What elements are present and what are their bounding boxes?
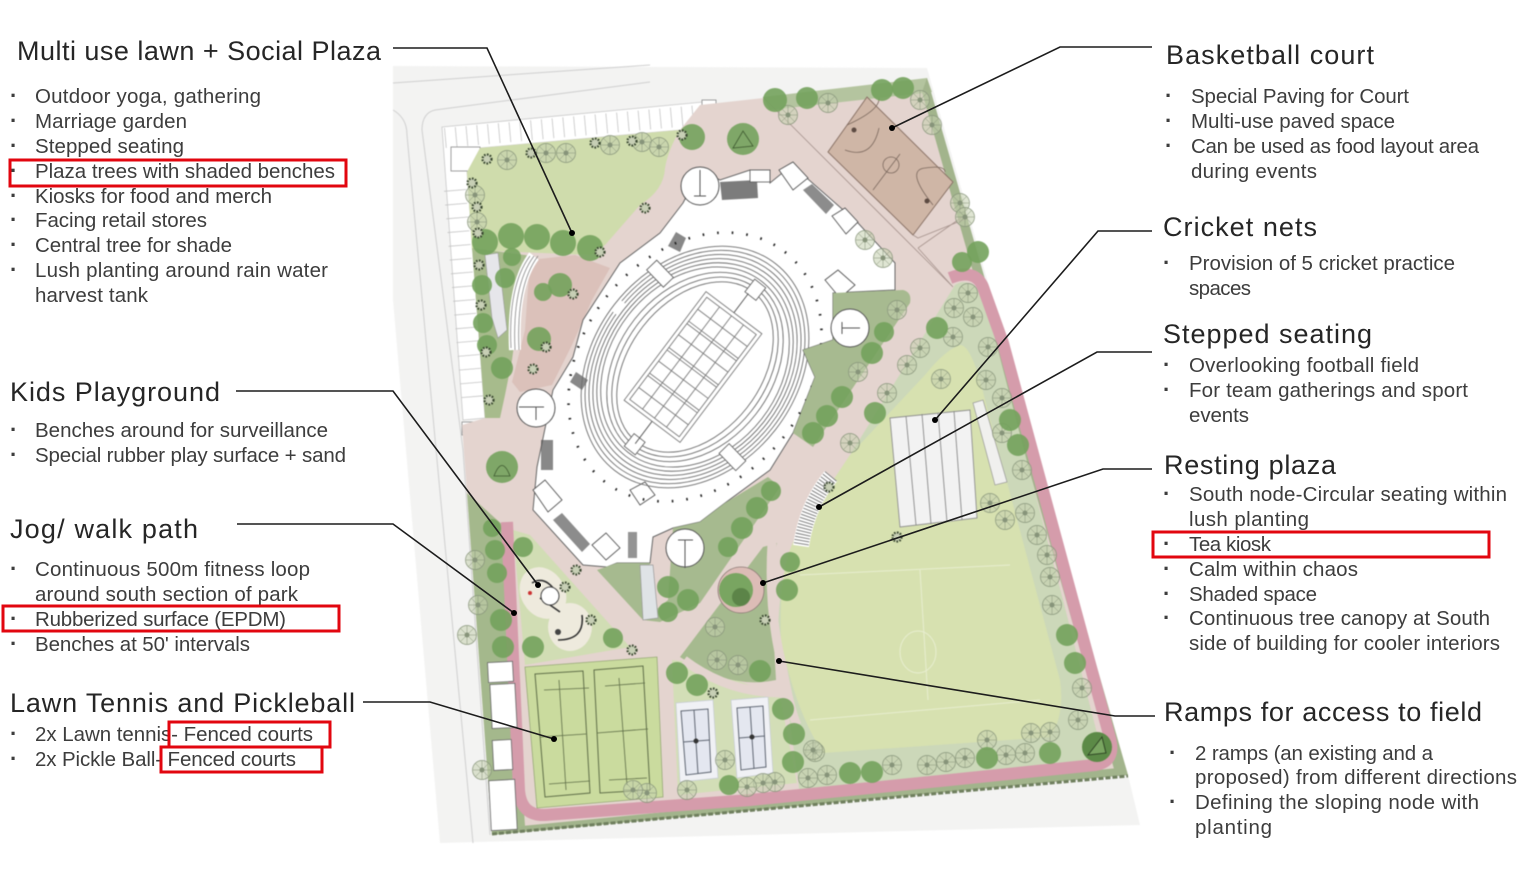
text block: resting plaza: side of building for cooler interiors [1189,632,1500,655]
text block: lawn tennis and pickleball: 2x Lawn tennis- Fenced courts [35,723,313,746]
text block: basketball court: · [1165,83,1172,108]
text block: basketball court: Special Paving for Court [1191,85,1409,108]
south-west stair block [570,372,588,390]
text block: cricket nets: · [1163,250,1170,275]
paved site base [462,80,1128,835]
football field [781,345,1061,753]
text block: cricket nets: Cricket nets [1163,212,1317,242]
resting plaza [718,567,764,613]
text block: jog walk path [10,514,310,656]
text block: multi use lawn [10,36,382,307]
text block: resting plaza: · [1163,581,1170,606]
rain water harvest tank trees [494,131,753,476]
text block: resting plaza: · [1163,605,1170,630]
west planting strip south [467,493,525,835]
list: multi use lawn items: Outdoor yoga, gathering [35,85,261,108]
list: multi use lawn items [10,83,335,307]
leader line: tennis [363,702,557,742]
south corner tree [1082,732,1112,762]
west stair strip [541,440,553,470]
list: multi use lawn items: · [10,207,17,232]
north-west stair block [668,232,686,252]
east rooms [779,162,858,298]
text block: resting plaza [1163,450,1507,655]
text block: resting plaza: Shaded space [1189,583,1317,606]
heading: multi use lawn: Multi use lawn + Social Plaza [17,36,382,66]
text block: ramps for access: · [1169,789,1176,814]
text block: stepped seating: Stepped seating [1163,319,1372,349]
text block: kids playground: · [10,417,17,442]
north stairs [720,180,758,200]
line trees [458,90,1092,802]
text block: kids playground: Benches around for surveillance [35,419,328,442]
south-west rooms [533,480,655,560]
gray rain water tank and arc seating [485,253,538,350]
text block: ramps for access: Ramps for access to field [1164,697,1482,727]
text block: resting plaza: Continuous tree canopy at South [1189,607,1490,630]
list: multi use lawn items: · [10,183,17,208]
social plaza paving [512,255,610,392]
text block: jog walk path: around south section of park [35,583,299,606]
text block: resting plaza: South node-Circular seating within [1189,483,1507,506]
lawn tennis courts [525,657,663,808]
text block: basketball court: Can be used as food layout area [1191,135,1480,158]
north-east plaza lines [763,97,968,287]
text block: cricket nets: Provision of 5 cricket practice [1189,252,1455,275]
text block: stepped seating: For team gatherings and sport [1189,379,1468,402]
text block: resting plaza: Calm within chaos [1189,558,1358,581]
text block: resting plaza: Resting plaza [1164,450,1337,480]
list: multi use lawn items: Kiosks for food and merch [35,185,272,208]
stadium seating rings [516,182,874,552]
leader line: resting plaza [760,469,1152,586]
list: multi use lawn items: Lush planting around rain water [35,259,328,282]
leader line: basketball [889,47,1152,131]
text block: basketball court: during events [1191,160,1317,183]
text block: kids playground: Special rubber play surface + sand [35,444,346,467]
text block: lawn tennis and pickleball: 2x Pickle Ball- Fenced courts [35,748,296,771]
east border strip [922,78,1128,776]
text block: ramps for access: proposed) from different directions [1195,766,1517,789]
centre circle [900,631,936,673]
south-west stairs [553,513,590,552]
list: multi use lawn items: Plaza trees with shaded benches [35,160,335,183]
south-west playground lawn [513,530,630,665]
text block: basketball court [1165,40,1480,183]
text block: kids playground [10,377,346,467]
basketball court [828,97,953,235]
text block: stepped seating: Overlooking football field [1189,354,1419,377]
text block: jog walk path: Jog/ walk path [10,514,198,544]
kids playground [510,559,592,651]
text block: ramps for access: Defining the sloping node with [1195,791,1479,814]
text block: jog walk path: · [10,606,17,631]
list: multi use lawn items: Marriage garden [35,110,187,133]
text block: jog walk path: · [10,556,17,581]
list: multi use lawn items: · [10,257,17,282]
list: multi use lawn items: · [10,158,17,183]
text block: jog walk path: · [10,631,17,656]
text block: resting plaza: · [1163,481,1170,506]
text block: stepped seating: · [1163,352,1170,377]
north kiosk box [750,170,770,182]
text block: lawn tennis and pickleball: Lawn Tennis and Pickleball [10,688,355,718]
highlight box: fenced lawn tennis [169,722,330,747]
leader line: cricket nets [932,231,1152,423]
central building garden [597,477,780,622]
text block: basketball court: Multi-use paved space [1191,110,1395,133]
text block: stepped seating [1163,319,1468,427]
text block: ramps for access [1164,697,1517,839]
text block: resting plaza: lush planting [1189,508,1309,531]
leader line: kids playground [236,391,541,588]
text block: ramps for access: · [1169,740,1176,765]
highlight box: rubberized surface [3,606,339,631]
tile strip [640,565,658,620]
pickleball lawn [672,660,797,795]
text block: lawn tennis and pickleball [10,688,355,771]
text block: stepped seating: events [1189,404,1249,427]
highlight box: tea kiosk [1153,532,1489,557]
jog path [507,275,1111,815]
list: multi use lawn items: · [10,83,17,108]
surrounding road and parking [393,65,1140,843]
text block: kids playground: Kids Playground [10,377,220,407]
leader line: multi use lawn [393,48,575,236]
text block: jog walk path: Continuous 500m fitness loop [35,558,310,581]
small dark shrubs [468,130,902,698]
central south planting wedge [680,543,777,682]
list: multi use lawn items: Central tree for shade [35,234,232,257]
west service blocks [487,661,517,831]
cricket nets [890,400,1007,527]
highlight box: fenced pickle ball [161,747,322,772]
pickleball courts [676,697,773,782]
site plan [393,65,1140,843]
text block: stepped seating: · [1163,377,1170,402]
text block: cricket nets [1163,212,1455,300]
solid canopy trees [472,77,1086,795]
west planting strip [472,248,532,418]
text block: ramps for access: 2 ramps (an existing and a [1195,742,1434,765]
highlight box: plaza trees [10,160,346,186]
text block: basketball court: · [1165,133,1172,158]
gates through rings [550,221,766,455]
leader line: jog path [237,524,517,616]
leader line: ramps [776,658,1155,716]
ring gaps at short axis [583,259,809,472]
round pavilions [517,167,869,568]
list: multi use lawn items: Stepped seating [35,135,184,158]
text block: jog walk path: Rubberized surface (EPDM) [35,608,286,631]
leader line: stepped seating [816,352,1152,510]
north-east planting edge [763,78,932,110]
building [533,162,895,567]
text block: kids playground: · [10,442,17,467]
stepped seating [801,476,831,546]
text block: ramps for access: planting [1195,816,1272,839]
ramp path [684,543,797,725]
text block: resting plaza: · [1163,556,1170,581]
text block: basketball court: · [1165,108,1172,133]
list: multi use lawn items: · [10,133,17,158]
text block: resting plaza: · [1163,531,1170,556]
text block: cricket nets: spaces [1189,277,1251,300]
south border strip [492,768,1128,835]
north-west multi use lawn [467,130,680,255]
football pitch blocks in stadium [607,272,776,465]
text block: resting plaza: Tea kiosk [1189,533,1272,556]
list: multi use lawn items: harvest tank [35,284,149,307]
text block: jog walk path: Benches at 50' intervals [35,633,250,656]
field markings [800,565,1040,720]
list: multi use lawn items: Facing retail stores [35,209,207,232]
north-east building garden [793,290,910,447]
text block: lawn tennis and pickleball: · [10,721,17,746]
text block: basketball court: Basketball court [1166,40,1374,70]
outer south border [492,776,1128,834]
south stairs [628,532,637,558]
east stairs [803,184,834,214]
list: multi use lawn items: · [10,108,17,133]
east park band [778,282,1100,795]
list: multi use lawn items: · [10,232,17,257]
text block: lawn tennis and pickleball: · [10,746,17,771]
